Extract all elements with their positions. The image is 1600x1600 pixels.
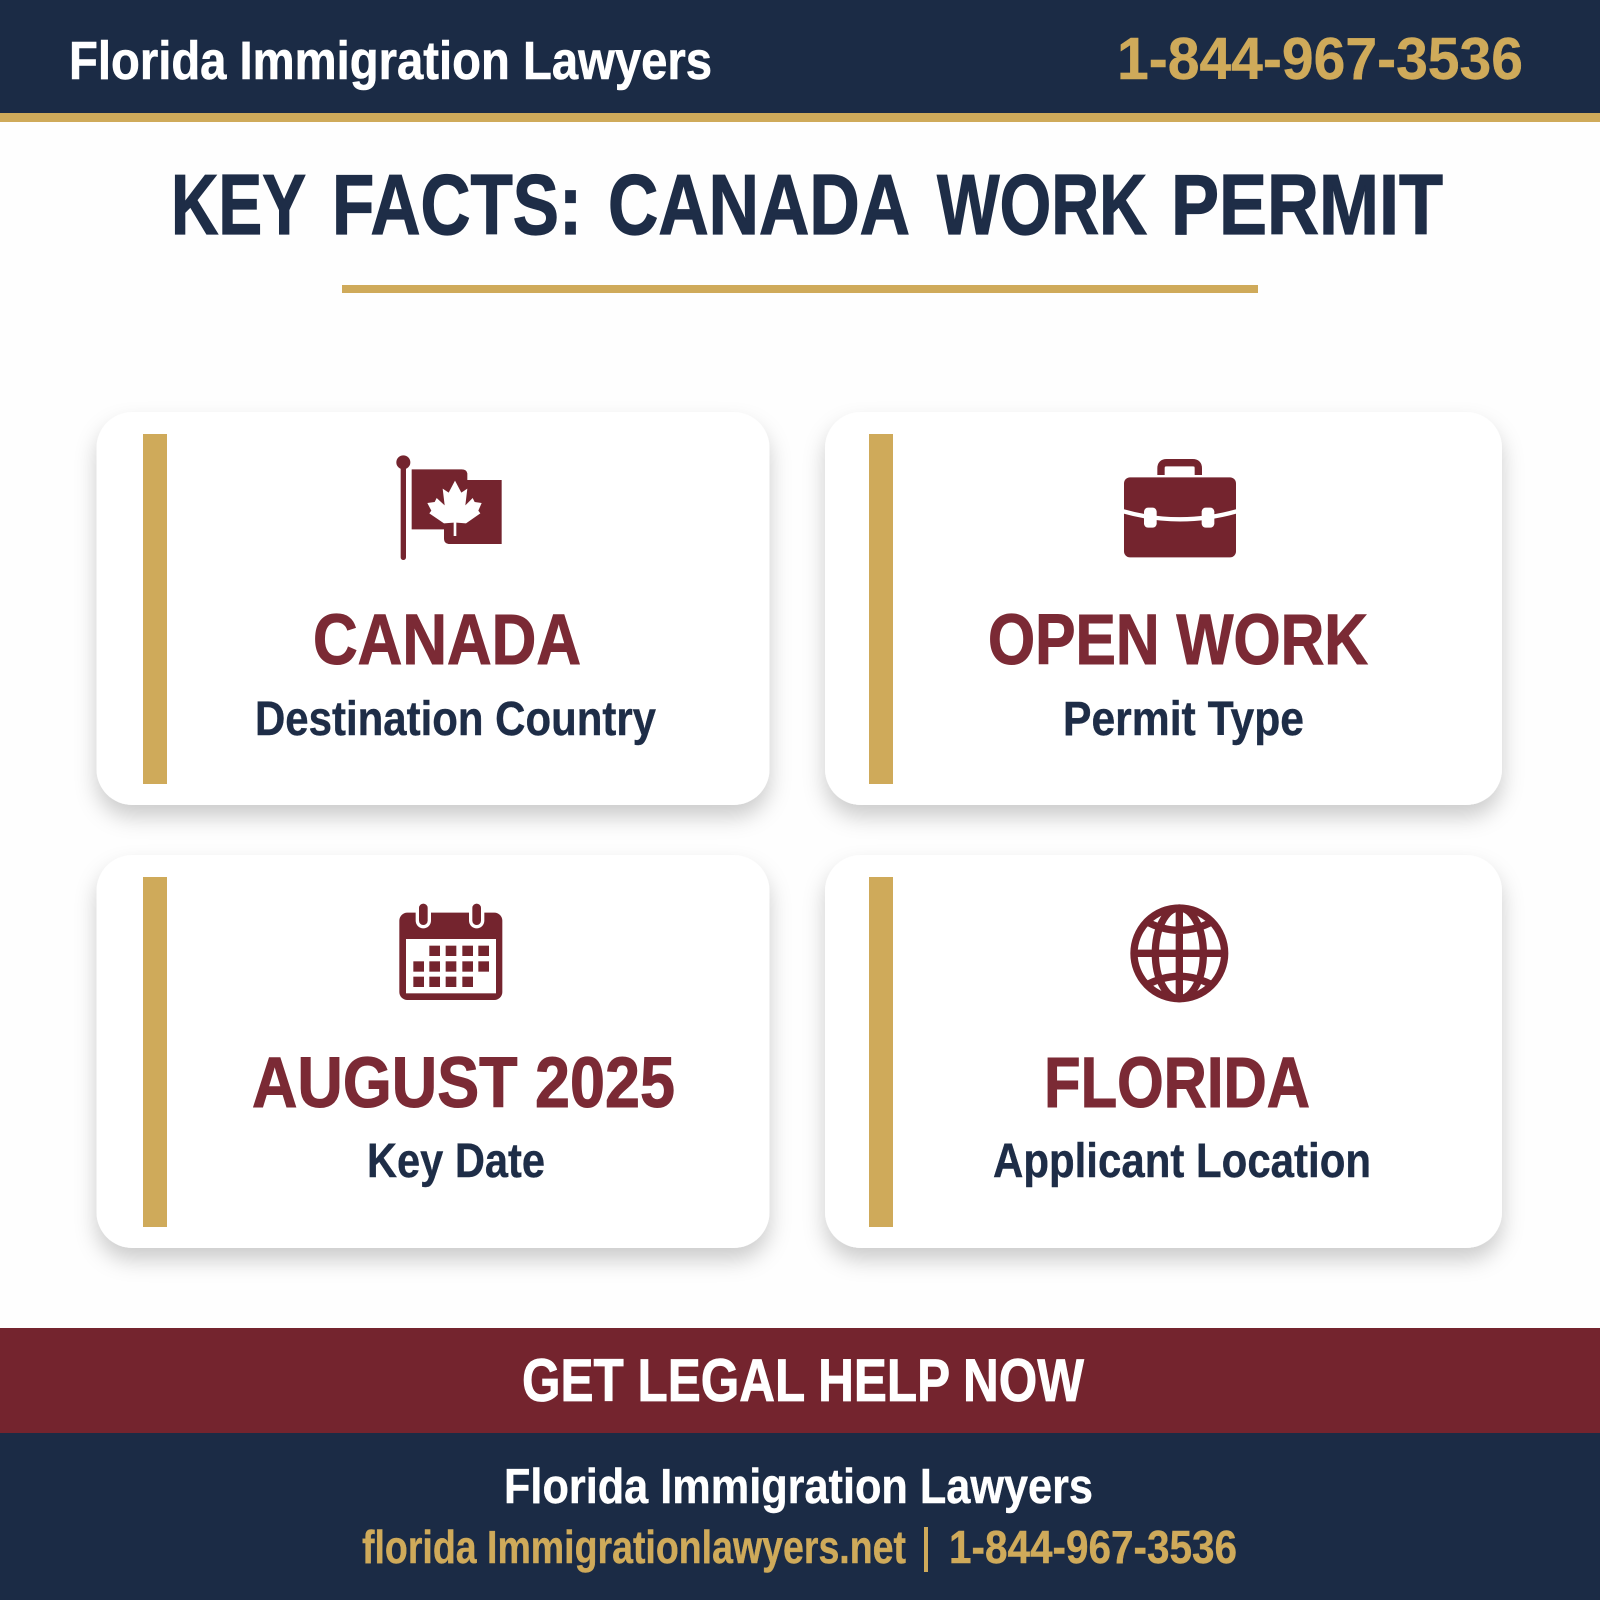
icon: briefcase — [1123, 463, 1237, 557]
footer contact line: florida Immigrationlawyers.net — [362, 1521, 906, 1573]
label: key date: Key Date — [367, 1135, 545, 1188]
footer contact line: 1-844-967-3536 — [949, 1521, 1237, 1573]
panel: permit type — [825, 412, 1502, 805]
title: FACTS: — [332, 158, 582, 253]
value: Florida: FLORIDA — [1044, 1044, 1310, 1123]
panel: destination country — [96, 412, 770, 805]
icon: globe — [1134, 908, 1225, 999]
title: PERMIT — [1171, 158, 1443, 253]
label: permit type: Permit Type — [1063, 693, 1304, 746]
title: KEY — [171, 158, 306, 253]
value: Canada: CANADA — [313, 601, 581, 680]
label: destination country: Destination Country — [255, 693, 656, 746]
title — [171, 158, 1443, 253]
phone number: 1-844-967-3536 — [1117, 26, 1523, 92]
firm name: Florida Immigration Lawyers — [69, 31, 712, 91]
icon: calendar — [399, 902, 502, 1000]
footer firm name: Florida Immigration Lawyers — [504, 1460, 1093, 1514]
panel: applicant location — [825, 855, 1502, 1248]
footer — [0, 1433, 1600, 1600]
value: open work: OPEN WORK — [988, 601, 1368, 680]
title: CANADA — [608, 158, 910, 253]
title underline — [342, 285, 1258, 293]
call to action band: GET LEGAL HELP NOW — [522, 1347, 1084, 1414]
panel: key date — [96, 855, 770, 1248]
title: WORK — [937, 158, 1147, 253]
header bar — [0, 0, 1600, 122]
call to action band — [0, 1328, 1600, 1433]
value: August 2025: AUGUST 2025 — [252, 1044, 675, 1123]
icon: Canadian flag — [396, 455, 502, 560]
label: applicant location: Applicant Location — [993, 1135, 1371, 1188]
